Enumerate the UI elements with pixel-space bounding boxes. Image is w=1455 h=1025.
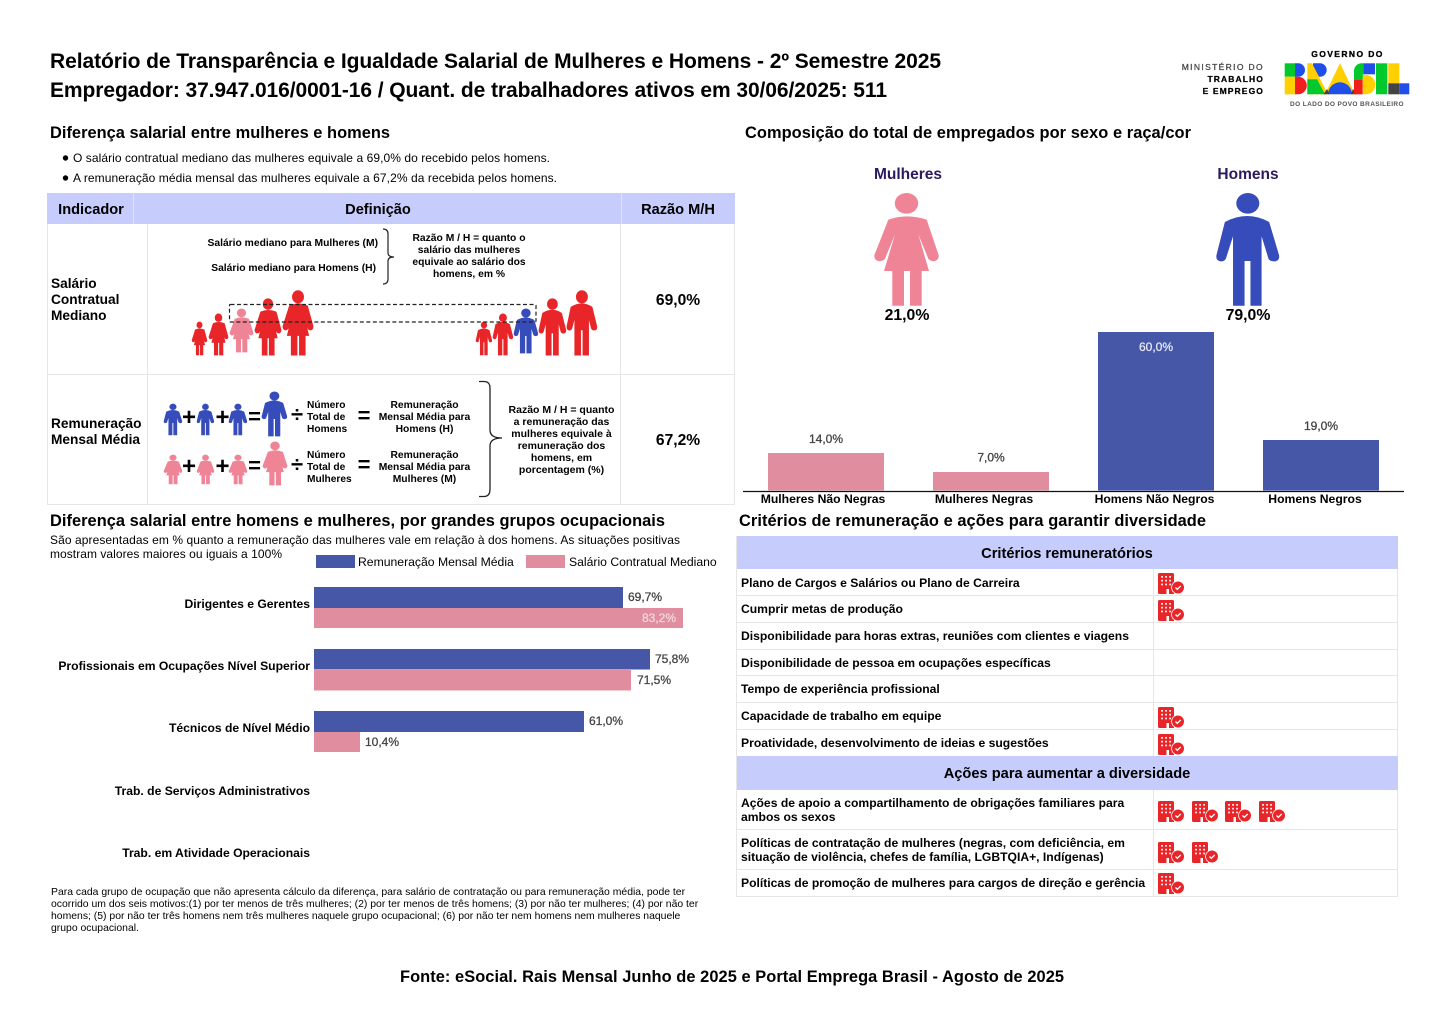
formula: women: + [215,453,230,480]
text block: bullets [63,151,557,185]
band: critérios remuneratórios: Critérios remuneratórios [981,546,1153,562]
text block: nota de rodapé: Para cada grupo de ocupação que não apresenta cálculo da diferença, para salário de contratação ou para remuneração média, pode ter [51,887,686,898]
formula: men: Remuneração [390,400,459,411]
bar chart: grupos ocupacionais: Profissionais em Ocupações Nível Superior [58,659,310,673]
table header: Indicador [58,202,124,218]
ratio note: homens, em [531,452,592,464]
panel: homens total: 79,0% [1226,307,1270,324]
legend: Remuneração Mensal Média [358,555,514,569]
bar chart: composição por sexo e raça/cor: 60,0% [1139,340,1173,354]
text block: subtítulo [50,533,680,561]
bar chart: grupos ocupacionais: 61,0% [589,714,623,728]
formula: men: = [248,404,261,429]
panel: mulheres total: Mulheres [874,166,942,183]
formula: men: = [358,403,370,428]
row: salário contratual mediano [51,229,700,355]
bar chart: grupos ocupacionais: 83,2% [642,611,676,625]
formula: men: ÷ [291,402,303,427]
logo: Ministério do Trabalho e Emprego: E EMPREGO [1203,86,1264,96]
criteria list: Proatividade, desenvolvimento de ideias e sugestões [741,736,1049,750]
formula: men: Número [307,400,346,411]
criteria list [741,576,1129,750]
formula: women: + [182,453,196,480]
icons: women ordered by salary [192,291,313,355]
logo: Governo do Brasil [1285,49,1409,108]
row: salário contratual mediano: Mediano [51,308,107,323]
criteria list: Disponibilidade de pessoa em ocupações específicas [741,656,1051,670]
ratio note: salário das mulheres [418,245,520,256]
bar chart: composição por sexo e raça/cor: 14,0% [809,432,843,446]
formula: men: Homens [307,424,348,435]
title [50,50,941,102]
bar chart: composição por sexo e raça/cor: Mulheres Não Negras [761,492,886,506]
row: remuneração mensal média: 67,2% [656,432,700,449]
formula: men: Total de [307,412,346,423]
logo: Ministério do Trabalho e Emprego [1182,62,1264,96]
band: ações: Ações para aumentar a diversidade [944,766,1190,782]
table header: Razão M/H [641,202,715,218]
actions list: ambos os sexos [741,810,836,824]
ratio note: homens, em % [433,269,505,280]
icons: critérios adotados [1158,573,1184,755]
actions list: Políticas de promoção de mulheres para cargos de direção e gerência [741,876,1145,890]
formula: women: Número [307,450,346,461]
text block: bullets: O salário contratual mediano das mulheres equivale a 69,0% do recebido pelos homens. [73,151,550,165]
formula: women: Remuneração [390,450,459,461]
brace [479,382,502,496]
row: remuneração mensal média: Mensal Média [51,432,140,447]
heading: diferença salarial: Diferença salarial entre mulheres e homens [50,124,390,142]
formula labels: Salário mediano para Mulheres (M) [207,238,378,249]
row: remuneração mensal média [51,382,700,496]
bar chart: grupos ocupacionais: Trab. de Serviços Administrativos [115,784,310,798]
ratio note: mulheres equivale à [511,428,612,440]
panel: homens total: Homens [1217,166,1279,183]
criteria list: Capacidade de trabalho em equipe [741,709,942,723]
bar chart: composição por sexo e raça/cor: Homens Negros [1268,492,1362,506]
bar chart: grupos ocupacionais: 75,8% [655,652,689,666]
text block: bullets: A remuneração média mensal das mulheres equivale a 67,2% da recebida pelos homens. [73,171,557,185]
actions list: Políticas de contratação de mulheres (negras, com deficiência, em [741,836,1125,850]
table header: Definição [345,202,411,218]
formula labels [207,238,378,274]
panel: mulheres total [874,166,942,324]
formula: women: ÷ [291,452,303,477]
bar chart: composição por sexo e raça/cor: Mulheres Negras [935,492,1033,506]
text block: nota de rodapé: grupo ocupacional. [51,923,139,934]
formula: women: Mulheres [307,474,352,485]
ratio note: porcentagem (%) [519,464,604,476]
formula: men: Mensal Média para [379,412,471,423]
criteria list: Disponibilidade para horas extras, reuniões com clientes e viagens [741,629,1129,643]
row: salário contratual mediano: Contratual [51,292,119,307]
brace [383,229,394,284]
heading: critérios: Critérios de remuneração e ações para garantir diversidade [739,512,1206,530]
formula: women: Mulheres (M) [393,474,456,485]
band: critérios remuneratórios [737,536,1398,569]
source line: Fonte: eSocial. Rais Mensal Junho de 2025 e Portal Emprega Brasil - Agosto de 2025 [400,968,1064,986]
ratio note: Razão M / H = quanto [509,404,614,416]
icons: men ordered by salary [476,291,597,355]
legend [316,555,717,569]
actions list: Ações de apoio a compartilhamento de obrigações familiares para [741,796,1124,810]
formula: women: = [248,453,261,478]
formula: women [164,442,471,485]
band: ações [737,756,1398,790]
panel: homens total [1216,166,1279,324]
bar chart: composição por sexo e raça/cor: 7,0% [977,450,1005,464]
bar chart: grupos ocupacionais: Técnicos de Nível Médio [169,721,310,735]
legend: Salário Contratual Mediano [569,555,717,569]
bar chart: composição por sexo e raça/cor: 19,0% [1304,419,1338,433]
ratio note: equivale ao salário dos [412,257,526,268]
title: Relatório de Transparência e Igualdade Salarial de Mulheres e Homens - 2º Semestre 2025 [50,50,941,73]
formula: men: Homens (H) [396,424,453,435]
bar chart: composição por sexo e raça/cor: Homens Não Negros [1095,492,1215,506]
criteria list: Tempo de experiência profissional [741,682,940,696]
text block: nota de rodapé: ocorrido um dos seis motivos:(1) por ter menos de três mulheres; (2) por ter menos de três homens; (3) por não ter mulheres; (4) por não ter [51,899,699,910]
panel: mulheres total: 21,0% [885,307,929,324]
logo: Ministério do Trabalho e Emprego: MINISTÉRIO DO [1182,62,1264,72]
formula: men: + [215,404,230,431]
row: remuneração mensal média: Remuneração [51,416,142,431]
bar chart: composição por sexo e raça/cor [743,332,1404,506]
title: Empregador: 37.947.016/0001-16 / Quant. de trabalhadores ativos em 30/06/2025: 511 [50,79,887,102]
text block: nota de rodapé [51,887,699,934]
bar chart: grupos ocupacionais: Trab. em Atividade Operacionais [122,846,310,860]
row: salário contratual mediano: Salário [51,276,97,291]
heading: composição: Composição do total de empregados por sexo e raça/cor [745,124,1192,142]
text block: subtítulo: São apresentadas em % quanto a remuneração das mulheres vale em relação à dos homens. As situações positivas [50,533,680,547]
icons: ações adotadas [1158,801,1285,894]
logo: Governo do Brasil: GOVERNO DO [1311,49,1384,59]
text block: nota de rodapé: homens; (5) por não ter três homens nem três mulheres naquele grupo ocupacional; (6) por não ter nem homens nem mulheres naquele [51,911,681,922]
criteria list: Cumprir metas de produção [741,602,903,616]
bar chart: grupos ocupacionais: 69,7% [628,590,662,604]
formula: women: = [358,452,370,477]
formula: men [164,392,471,436]
formula: men: + [182,404,196,431]
text block: subtítulo: mostram valores maiores ou iguais a 100% [50,547,282,561]
formula: women: Mensal Média para [379,462,471,473]
formula labels: Salário mediano para Homens (H) [211,263,376,274]
logo: Governo do Brasil: DO LADO DO POVO BRASILEIRO [1290,101,1404,108]
ratio note: Razão M / H = quanto o [413,233,525,244]
bar chart: grupos ocupacionais: 71,5% [637,673,671,687]
bar chart: grupos ocupacionais: 10,4% [365,735,399,749]
ratio note: a remuneração das [514,416,610,428]
formula: women: Total de [307,462,346,473]
logo: Ministério do Trabalho e Emprego: TRABALHO [1208,74,1264,84]
bar chart: grupos ocupacionais [58,587,689,860]
criteria list: Plano de Cargos e Salários ou Plano de Carreira [741,576,1020,590]
actions list [741,796,1145,890]
heading: grupos ocupacionais: Diferença salarial entre homens e mulheres, por grandes grupos ocupacionais [50,512,665,530]
panel: tabela de indicadores [47,193,735,504]
ratio note [509,404,614,476]
bar chart: grupos ocupacionais: Dirigentes e Gerentes [184,597,310,611]
ratio note: remuneração dos [518,440,605,452]
table header [47,193,735,224]
ratio note [412,233,526,280]
panel: tabela de critérios [736,536,1398,896]
row: salário contratual mediano: 69,0% [656,292,700,309]
actions list: situação de violência, chefes de família, LGBTQIA+, Indígenas) [741,850,1104,864]
